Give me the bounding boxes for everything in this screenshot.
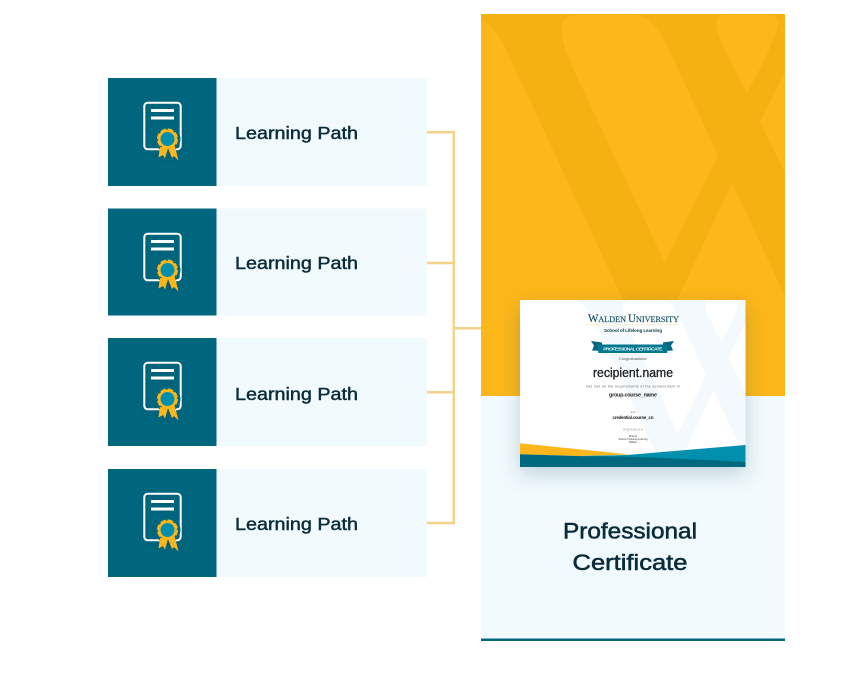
row: learning path 1 bbox=[108, 78, 427, 186]
label: learning path 1: Learning Path bbox=[235, 123, 358, 143]
row: learning path 4 bbox=[108, 469, 427, 577]
icon: certificate with ribbon 2 bbox=[144, 234, 181, 292]
certificate document bbox=[510, 297, 756, 484]
certificate watermark bbox=[520, 300, 746, 467]
certificate recipient name: recipient.name bbox=[593, 366, 673, 380]
certificate signer: Director bbox=[629, 435, 637, 438]
panel title bbox=[563, 518, 697, 575]
certificate signer: Walden bbox=[629, 441, 638, 444]
panel: professional certificate bbox=[481, 14, 785, 641]
certificate school name: School of Lifelong Learning bbox=[604, 328, 662, 333]
certificate signature: Signature bbox=[623, 426, 644, 432]
yellow header with W watermark bbox=[481, 14, 785, 396]
certificate credential: credential.course_cn bbox=[612, 415, 654, 420]
panel title: Certificate bbox=[572, 550, 688, 575]
row: learning path 2 bbox=[108, 208, 427, 316]
icon: certificate with ribbon 1 bbox=[144, 103, 181, 160]
certificate signer: School of Lifelong Learning bbox=[619, 438, 648, 441]
icon: certificate with ribbon 4 bbox=[144, 494, 181, 552]
connector lines bbox=[427, 131, 481, 524]
certificate and: and bbox=[631, 410, 636, 414]
certificate banner: PROFESSIONAL CERTIFICATE bbox=[603, 346, 663, 352]
certificate banner bbox=[591, 341, 674, 353]
certificate description: has met all the requirements of the achievement in bbox=[586, 384, 680, 388]
icon: certificate with ribbon 3 bbox=[144, 363, 181, 420]
label: learning path 3: Learning Path bbox=[235, 384, 358, 404]
label: learning path 2: Learning Path bbox=[235, 253, 358, 273]
certificate signer bbox=[619, 435, 648, 444]
row: learning path 3 bbox=[108, 338, 427, 446]
certificate congratulations: Congratulations! bbox=[619, 357, 647, 361]
label: learning path 4: Learning Path bbox=[235, 514, 358, 534]
infographic bbox=[108, 14, 785, 641]
certificate course name: group.course_name bbox=[609, 392, 657, 398]
certificate wordmark: WALDEN UNIVERSITY bbox=[588, 313, 679, 325]
panel title: Professional bbox=[563, 518, 697, 544]
